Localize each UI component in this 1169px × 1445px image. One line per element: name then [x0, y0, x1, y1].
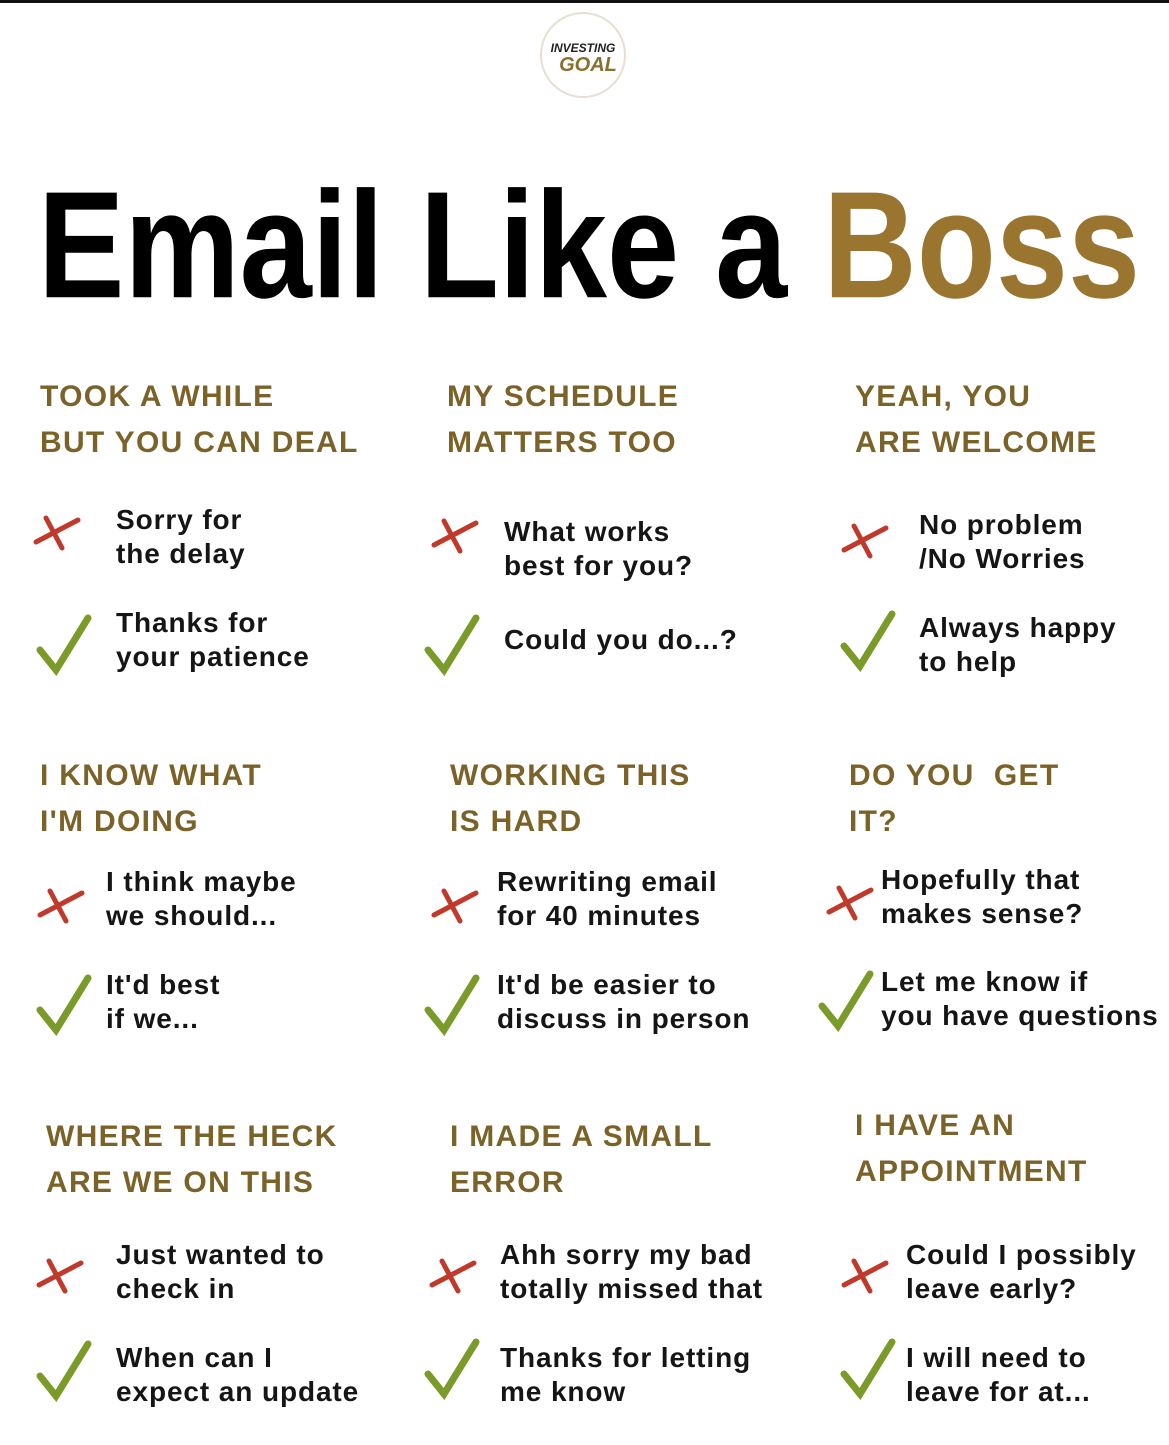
title: Email Like a Boss	[38, 160, 1140, 330]
panel: welcome: Always happy	[919, 612, 1117, 643]
panel: working hard: IS HARD	[450, 805, 582, 838]
panel: get it	[818, 759, 1159, 1032]
panel: appointment: APPOINTMENT	[855, 1155, 1088, 1188]
panel: get it: IT?	[849, 805, 898, 838]
panel: know what	[36, 759, 297, 1036]
panel: appointment: Could I possibly	[906, 1239, 1137, 1270]
panel: my schedule: MY SCHEDULE	[447, 380, 679, 413]
panel: where the heck: ARE WE ON THIS	[46, 1166, 314, 1199]
panel: working hard	[424, 759, 750, 1036]
panel: get it: makes sense?	[881, 898, 1083, 929]
panel: took a while: the delay	[116, 538, 245, 569]
panel: small error: Ahh sorry my bad	[500, 1239, 752, 1270]
panel: my schedule	[424, 380, 738, 676]
logo	[540, 12, 626, 98]
panel: get it: DO YOU GET	[849, 759, 1059, 792]
logo: GOAL	[559, 54, 617, 76]
panel: appointment	[840, 1109, 1137, 1407]
panel: appointment: leave early?	[906, 1273, 1077, 1304]
panel: get it: Let me know if	[881, 966, 1088, 997]
logo: INVESTING	[551, 41, 615, 55]
panel: took a while: TOOK A WHILE	[40, 380, 274, 413]
panel: working hard: for 40 minutes	[497, 900, 701, 931]
panel: working hard: Rewriting email	[497, 866, 717, 897]
panel: know what: I KNOW WHAT	[40, 759, 262, 792]
panel: know what: I think maybe	[106, 866, 297, 897]
panel: took a while: Thanks for	[116, 607, 268, 638]
panel: small error	[424, 1120, 763, 1407]
panel: appointment: I will need to	[906, 1342, 1087, 1373]
panel: my schedule: best for you?	[504, 550, 693, 581]
panel: welcome: ARE WELCOME	[855, 426, 1098, 459]
panel: my schedule: MATTERS TOO	[447, 426, 677, 459]
panel: small error: totally missed that	[500, 1273, 763, 1304]
panel: know what: I'M DOING	[40, 805, 199, 838]
panel: took a while: Sorry for	[116, 504, 242, 535]
panel: small error: I MADE A SMALL	[450, 1120, 713, 1153]
panel: working hard: discuss in person	[497, 1003, 750, 1034]
panel: small error: Thanks for letting	[500, 1342, 751, 1373]
panel: where the heck: check in	[116, 1273, 235, 1304]
panel: small error: me know	[500, 1376, 626, 1407]
panel: welcome: No problem	[919, 509, 1084, 540]
panel: welcome	[840, 380, 1117, 677]
panel: my schedule: What works	[504, 516, 670, 547]
panel: where the heck: Just wanted to	[116, 1239, 325, 1270]
panel: where the heck: When can I	[116, 1342, 273, 1373]
panel: welcome: to help	[919, 646, 1017, 677]
panel: took a while: BUT YOU CAN DEAL	[40, 426, 359, 459]
panel: where the heck	[36, 1120, 359, 1407]
panel: took a while: your patience	[116, 641, 310, 672]
panel: know what: It'd best	[106, 969, 220, 1000]
panel: welcome: YEAH, YOU	[855, 380, 1031, 413]
panel: get it: you have questions	[881, 1000, 1159, 1031]
panel: took a while	[34, 380, 359, 676]
panel: small error: ERROR	[450, 1166, 565, 1199]
panel: working hard: WORKING THIS	[450, 759, 691, 792]
panel: get it: Hopefully that	[881, 864, 1080, 895]
panel: working hard: It'd be easier to	[497, 969, 717, 1000]
panel: where the heck: WHERE THE HECK	[46, 1120, 338, 1153]
panel: welcome: /No Worries	[919, 543, 1086, 574]
panel: know what: if we...	[106, 1003, 199, 1034]
panel: know what: we should...	[106, 900, 277, 931]
panel: my schedule: Could you do...?	[504, 624, 738, 655]
panel: where the heck: expect an update	[116, 1376, 359, 1407]
panel: appointment: leave for at...	[906, 1376, 1091, 1407]
panel: appointment: I HAVE AN	[855, 1109, 1015, 1142]
